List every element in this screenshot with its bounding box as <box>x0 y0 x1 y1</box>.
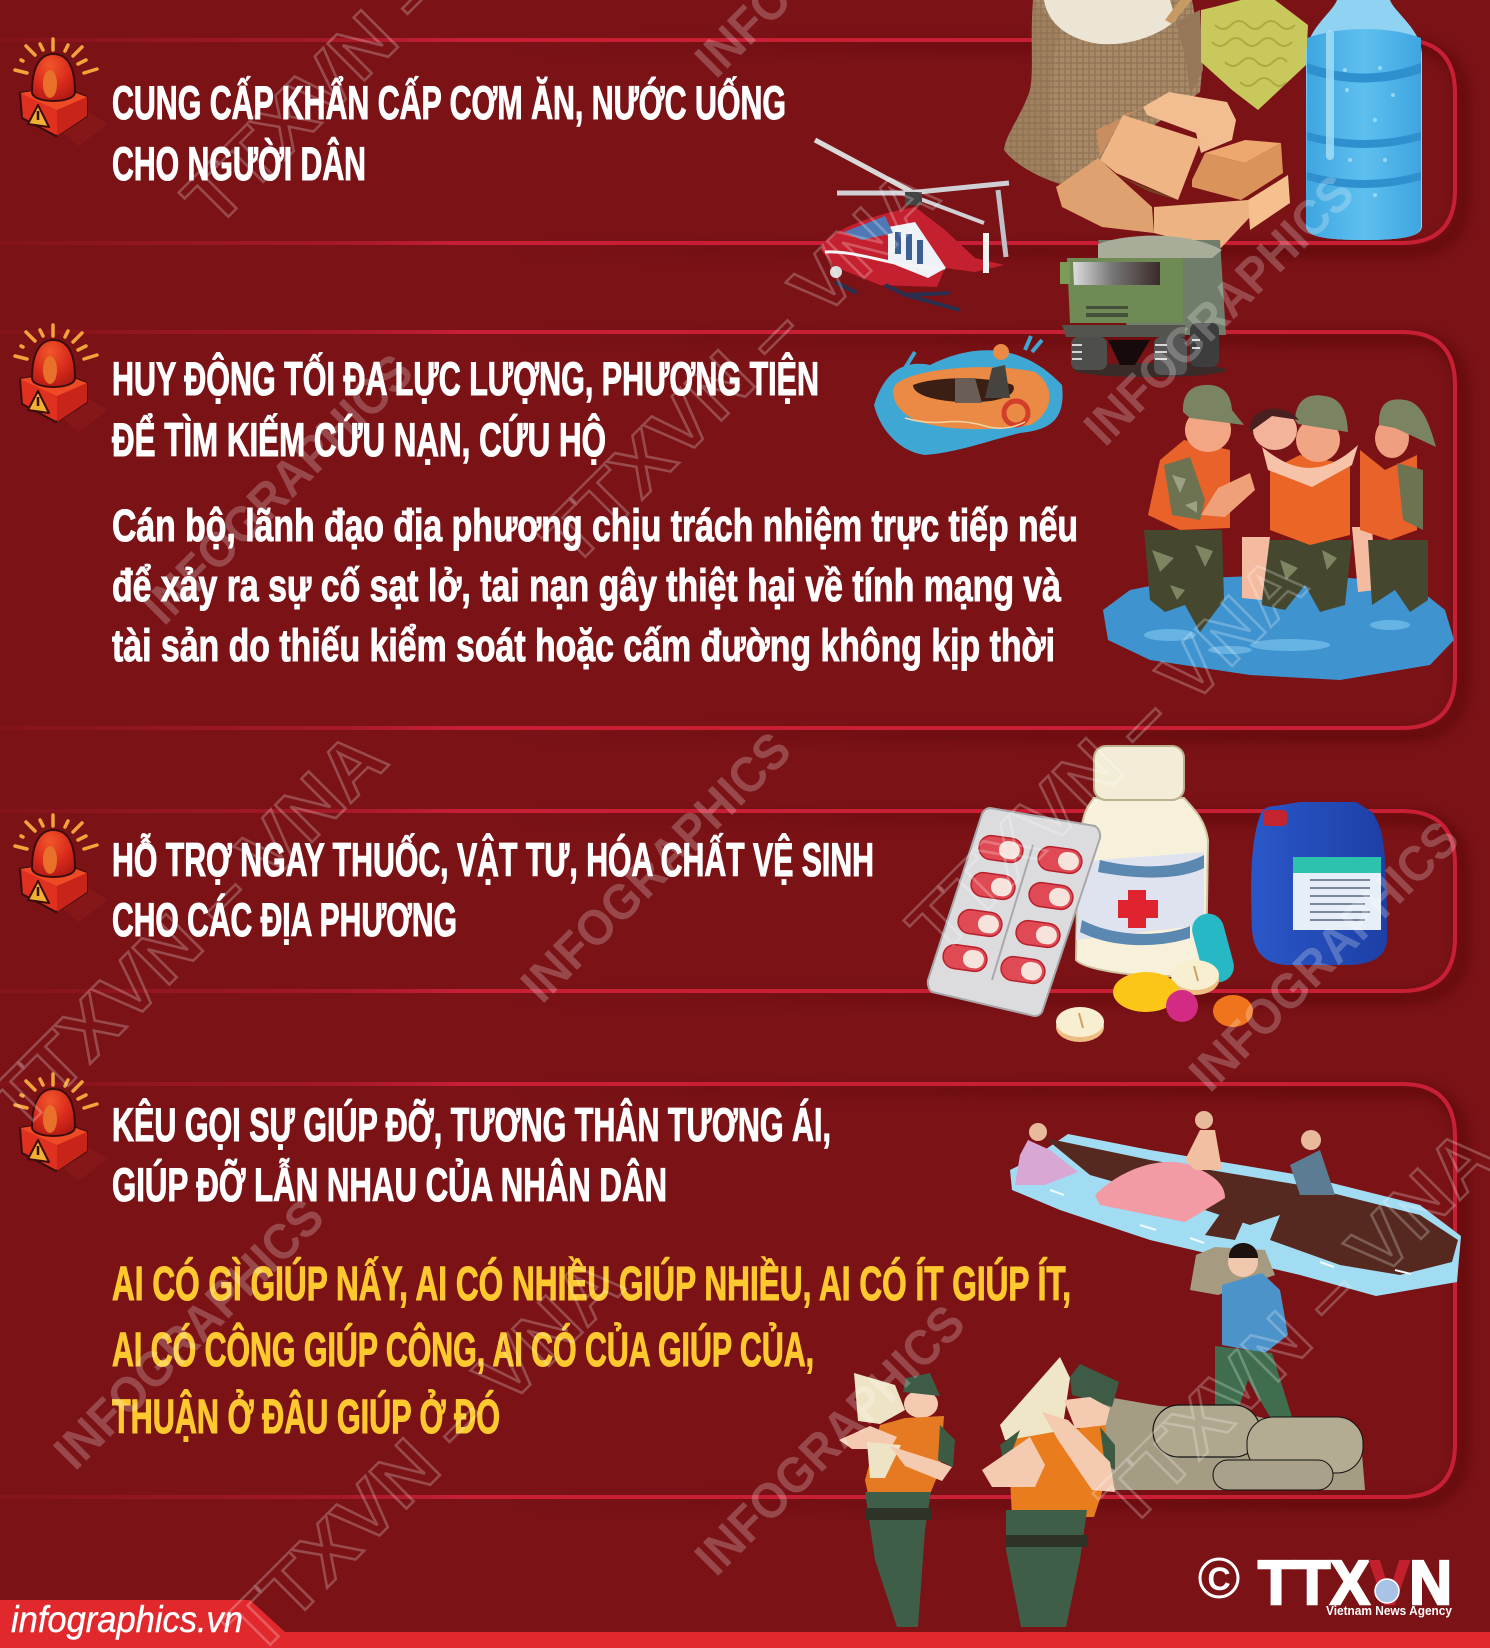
illustration: medicine blister pack <box>928 808 1100 1016</box>
panel: rescue outline <box>0 332 1455 728</box>
illustration: pills <box>1056 910 1253 1042</box>
watermarks: TTXVN – VNA <box>892 539 1323 970</box>
person middle <box>1185 1111 1222 1170</box>
child <box>1242 409 1376 600</box>
heading: medicine: HỖ TRỢ NGAY THUỐC, VẬT TƯ, HÓA CHẤT VỆ SINH <box>112 833 874 886</box>
heading: food and water <box>112 76 786 190</box>
illustration: sandbags <box>1102 1396 1365 1490</box>
logo: copyright <box>1200 1559 1238 1597</box>
illustration: army truck <box>1060 236 1226 377</box>
watermarks: INFOGRAPHICS <box>43 1188 335 1480</box>
person right <box>1290 1130 1335 1195</box>
icon: siren 4 <box>15 1074 108 1181</box>
heading: medicine: CHO CÁC ĐỊA PHƯƠNG <box>112 893 457 946</box>
heading: solidarity: KÊU GỌI SỰ GIÚP ĐỠ, TƯƠNG THÂN TƯƠNG ÁI, <box>112 1098 831 1151</box>
right edge strip <box>1485 0 1490 1632</box>
illustration: soldier with sack left <box>839 1373 955 1627</box>
watermarks: INFOGRAPHICS <box>132 343 424 635</box>
footer: red band <box>0 1600 1490 1648</box>
callout: yellow slogan <box>112 1256 1071 1444</box>
person left <box>1015 1123 1078 1185</box>
watermarks: INFOGRAPHICS <box>510 721 802 1013</box>
heading: food and water: CHO NGƯỜI DÂN <box>112 137 366 190</box>
soldier right <box>1360 399 1436 612</box>
text block: responsibility: để xảy ra sự cố sạt lở, tai nạn gây thiệt hại về tính mạng và <box>112 560 1062 611</box>
logo: copyright: C <box>1207 1561 1231 1597</box>
heading: solidarity: GIÚP ĐỠ LẪN NHAU CỦA NHÂN DÂN <box>112 1158 667 1211</box>
soldier left <box>1144 385 1255 632</box>
heading: solidarity <box>112 1098 831 1211</box>
text block: responsibility <box>112 500 1078 671</box>
logo: TTXVN: TTXVN <box>1258 1549 1452 1618</box>
icon: siren 2 <box>15 325 108 432</box>
heading: rescue: ĐỂ TÌM KIẾM CỨU NẠN, CỨU HỘ <box>112 413 606 466</box>
illustration: chemical jerrycan <box>1251 802 1387 965</box>
panel: solidarity outline <box>0 1084 1455 1497</box>
soldier middle <box>1262 395 1352 612</box>
watermarks: INFOGRAPHICS <box>1178 810 1470 1102</box>
illustration: instant noodles <box>1201 0 1308 110</box>
panel: food and water outline <box>0 40 1455 243</box>
heading: rescue: HUY ĐỘNG TỐI ĐA LỰC LƯỢNG, PHƯƠNG TIỆN <box>112 352 819 405</box>
illustration: water bottle <box>1306 0 1422 240</box>
callout: yellow slogan: AI CÓ CÔNG GIÚP CÔNG, AI CÓ CỦA GIÚP CỦA, <box>112 1322 814 1377</box>
watermarks: INFOGRAPHICS <box>1073 164 1365 456</box>
footer: website: infographics.vn <box>11 1599 243 1640</box>
illustration: sugar blocks <box>1056 92 1290 250</box>
illustration: soldiers rescuing a child <box>1103 385 1454 680</box>
icon: siren 1 <box>15 39 108 146</box>
illustration: soldier with sack right <box>982 1357 1119 1627</box>
illustration: helicopter <box>815 140 1009 310</box>
illustration: medicine bottle <box>1076 746 1208 976</box>
panel shadows <box>500 46 1462 1503</box>
icon: siren 3 <box>15 815 108 922</box>
heading: food and water: CUNG CẤP KHẨN CẤP CƠM ĂN, NƯỚC UỐNG <box>112 76 786 129</box>
panel: medicine outline <box>0 811 1455 991</box>
watermarks: INFOGRAPHICS <box>684 1294 976 1586</box>
illustration: man carrying sack <box>1190 1243 1292 1417</box>
text block: responsibility: Cán bộ, lãnh đạo địa phương chịu trách nhiệm trực tiếp nếu <box>112 500 1078 551</box>
heading: medicine <box>112 833 874 946</box>
heading: rescue <box>112 352 819 466</box>
illustration: rice sack <box>1004 0 1203 184</box>
watermarks: TTXVN – VNA <box>524 151 955 582</box>
text block: responsibility: tài sản do thiếu kiểm soát hoặc cấm đường không kịp thời <box>112 620 1055 671</box>
watermarks: TTXVN – VNA <box>1081 1112 1490 1543</box>
logo: TTXVN: Vietnam News Agency <box>1326 1603 1453 1618</box>
illustration: flood boat <box>1010 1111 1461 1296</box>
illustration: rescue raft <box>874 336 1063 455</box>
callout: yellow slogan: THUẬN Ở ĐÂU GIÚP Ở ĐÓ <box>112 1389 500 1444</box>
